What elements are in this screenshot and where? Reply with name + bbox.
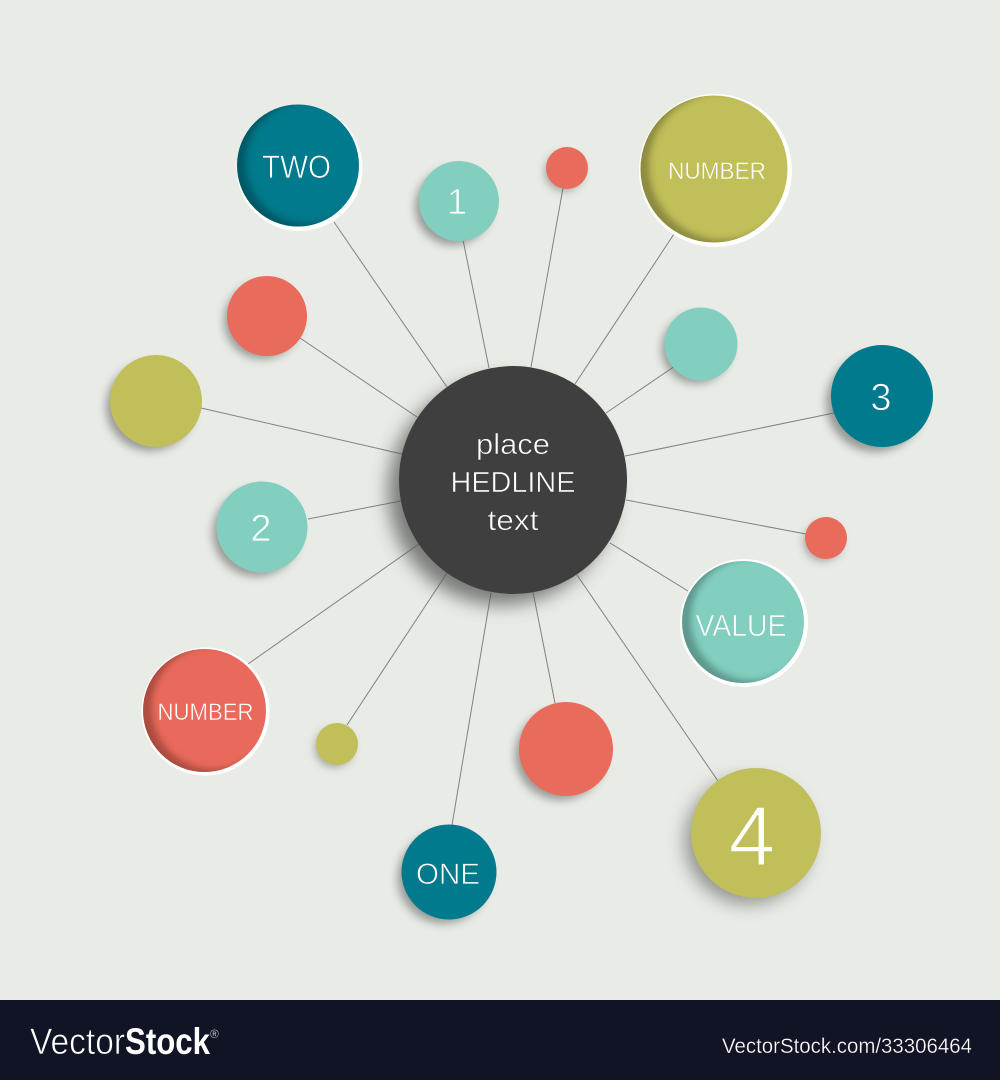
node: red left upper xyxy=(224,276,307,359)
node: small red top xyxy=(545,147,588,191)
node: 2 xyxy=(212,482,308,576)
node: VALUE xyxy=(680,559,808,687)
connector lines xyxy=(201,188,834,825)
node: TWO xyxy=(236,104,362,231)
footer logo xyxy=(30,1021,219,1062)
footer logo: ® xyxy=(210,1027,219,1041)
node: small olive xyxy=(315,723,358,767)
footer bar xyxy=(0,1000,1000,1080)
node: ONE: ONE xyxy=(416,858,480,891)
central hub: place HEDLINE text: text xyxy=(488,505,538,537)
node: 3: 3 xyxy=(870,377,892,419)
node: VALUE: VALUE xyxy=(696,608,786,643)
node: 4 xyxy=(685,768,821,904)
node: red bottom xyxy=(515,702,613,800)
node: 1: 1 xyxy=(447,181,467,222)
footer url: VectorStock.com/33306464 xyxy=(722,1035,972,1058)
node: 2: 2 xyxy=(250,508,272,550)
node: NUMBER red: NUMBER xyxy=(158,699,254,726)
footer logo: Vector xyxy=(30,1021,125,1062)
central hub: place HEDLINE text: place xyxy=(476,429,550,461)
node: NUMBER olive xyxy=(639,94,792,247)
node: NUMBER red xyxy=(142,648,270,776)
node: small red right xyxy=(804,517,847,561)
central hub: place HEDLINE text xyxy=(388,366,627,605)
node: ONE xyxy=(398,824,496,924)
node: teal right upper xyxy=(662,308,738,384)
node: olive left xyxy=(106,355,202,451)
node: 4: 4 xyxy=(729,789,775,883)
node: NUMBER olive: NUMBER xyxy=(668,158,766,185)
central hub: place HEDLINE text: HEDLINE xyxy=(450,467,576,499)
node: 3 xyxy=(826,345,933,452)
node: TWO: TWO xyxy=(262,149,331,185)
footer logo: Stock xyxy=(125,1021,210,1062)
node: 1 xyxy=(415,161,499,245)
